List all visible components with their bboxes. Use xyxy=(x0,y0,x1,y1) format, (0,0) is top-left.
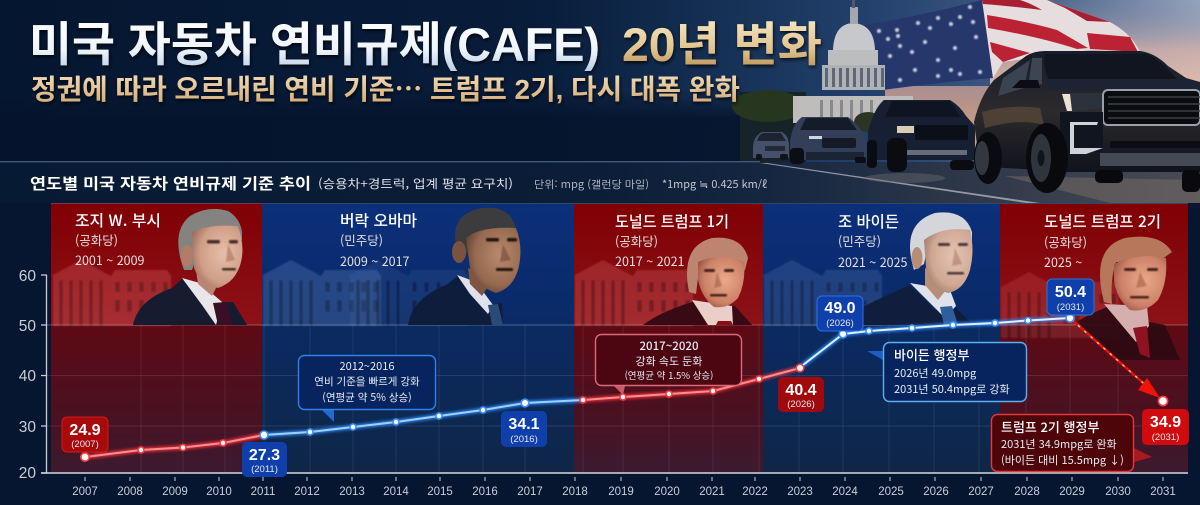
series: dotted rollback line with arrow xyxy=(1072,320,1160,398)
callout: Trump second administration: (바이든 대비 15.5mpg ↓) xyxy=(1001,452,1124,468)
label: Barack Obama: 2009 ~ 2017 xyxy=(340,251,410,270)
x axis with year labels: 2025 xyxy=(878,486,904,498)
value tag: 24.9 (2007) xyxy=(62,417,108,452)
callout: 2012-2016: 연비 기준을 빠르게 강화 xyxy=(314,374,420,389)
portrait: George W. Bush xyxy=(133,209,247,325)
x axis with year labels: 2019 xyxy=(608,486,634,498)
value tag: 34.9 (2031): (2031) xyxy=(1152,432,1179,443)
header banner with Capitol, flag and vehicles xyxy=(0,0,1200,203)
series: red segment 2018-2023 xyxy=(583,368,800,400)
chart heading: (승용차+경트럭, 업계 평균 요구치) xyxy=(318,175,513,192)
x axis with year labels: 2007 xyxy=(72,486,98,498)
x axis with year labels: 2012 xyxy=(294,486,320,498)
chart heading: 연도별 미국 자동차 연비규제 기준 추이 xyxy=(30,172,311,194)
label: Joe Biden: 2021 ~ 2025 xyxy=(838,252,908,271)
value tag: 40.4 (2026): 40.4 xyxy=(785,382,817,399)
white house silhouettes xyxy=(51,260,1119,338)
callout: Trump second administration: 2031년 34.9mpg로 완화 xyxy=(1001,436,1117,452)
y axis: 40 xyxy=(19,368,36,385)
value tag: 50.4 (2031) xyxy=(1047,279,1094,315)
portrait: Donald Trump second term xyxy=(1077,237,1180,360)
chart heading: *1mpg ≒ 0.425 km/ℓ xyxy=(662,177,767,192)
label: Barack Obama: 버락 오바마 xyxy=(340,209,417,231)
illustration: small car xyxy=(753,132,789,160)
callout: 2017-2020: (연평균 약 1.5% 상승) xyxy=(625,368,713,382)
illustration: large black SUV xyxy=(974,51,1200,193)
x axis with year labels: 2014 xyxy=(383,486,409,498)
x axis with year labels: 2013 xyxy=(339,486,365,498)
x axis with year labels: 2016 xyxy=(472,486,498,498)
y axis: 30 xyxy=(19,419,36,436)
administration bands xyxy=(51,203,1188,473)
value tag: 49.0 (2026): (2026) xyxy=(826,318,854,329)
value tag: 49.0 (2026): 49.0 xyxy=(824,300,856,317)
value tag: 34.1 (2016): (2016) xyxy=(510,434,538,445)
title: 20년 변화 xyxy=(622,18,822,71)
callout: Trump second administration: 트럼프 2기 행정부 xyxy=(1001,417,1099,436)
x axis with year labels: 2023 xyxy=(787,486,813,498)
y axis: 60 xyxy=(19,268,36,285)
label: Joe Biden: 조 바이든 xyxy=(838,210,899,232)
x axis with year labels: 2026 xyxy=(923,486,949,498)
gridlines xyxy=(46,325,1188,473)
x axis with year labels: 2022 xyxy=(742,486,768,498)
callout: 2012-2016 xyxy=(298,356,436,422)
callout: Biden administration: 2026년 49.0mpg xyxy=(894,365,977,381)
value tag: 34.1 (2016): 34.1 xyxy=(508,416,540,433)
portrait: Barack Obama xyxy=(408,208,520,325)
label: Donald Trump first term: 도널드 트럼프 1기 xyxy=(615,210,729,232)
x axis with year labels: 2021 xyxy=(699,486,725,498)
callout: 2012-2016: 2012~2016 xyxy=(340,358,394,374)
x axis with year labels: 2015 xyxy=(427,486,453,498)
x axis with year labels: 2017 xyxy=(517,486,543,498)
label: Donald Trump first term: (공화당) xyxy=(615,231,658,250)
label: Barack Obama: (민주당) xyxy=(340,230,383,249)
label: Donald Trump first term xyxy=(615,210,729,270)
x axis with year labels: 2024 xyxy=(832,486,858,498)
data point markers xyxy=(81,314,1168,461)
x axis with year labels: 2029 xyxy=(1059,486,1085,498)
value tag: 40.4 (2026) xyxy=(778,377,824,412)
callout: Biden administration: 바이든 행정부 xyxy=(894,345,969,364)
illustration: crossover xyxy=(790,117,866,164)
x axis with year labels: 2010 xyxy=(206,486,232,498)
label: Donald Trump second term: (공화당) xyxy=(1044,232,1087,251)
y axis xyxy=(19,268,47,482)
x axis with year labels: 2030 xyxy=(1105,486,1131,498)
label: Donald Trump second term xyxy=(1044,210,1161,271)
y axis: 50 xyxy=(19,318,36,335)
value tag: 27.3 (2011): (2011) xyxy=(251,464,278,475)
callout: Biden administration: 2031년 50.4mpg로 강화 xyxy=(894,381,1010,397)
x axis with year labels: 2027 xyxy=(968,486,994,498)
value tag: 50.4 (2031): 50.4 xyxy=(1055,284,1086,301)
label: George W. Bush: 조지 W. 부시 xyxy=(75,209,161,231)
title: 미국 자동차 연비규제(CAFE) xyxy=(29,18,600,71)
callout: Trump second administration xyxy=(992,414,1152,472)
callout: 2017-2020: 2017~2020 xyxy=(639,338,699,354)
series: red segment 2007-2011 xyxy=(85,435,264,457)
label: Donald Trump second term: 도널드 트럼프 2기 xyxy=(1044,210,1161,232)
x axis with year labels: 2008 xyxy=(117,486,143,498)
line chart: CAFE standard by year xyxy=(85,318,1160,457)
chart heading xyxy=(30,172,767,194)
value tag: 34.1 (2016) xyxy=(501,411,547,447)
x axis with year labels: 2011 xyxy=(251,486,275,498)
value tag: 27.3 (2011): 27.3 xyxy=(249,447,280,464)
illustration: Capitol building xyxy=(732,0,913,162)
label: Barack Obama xyxy=(340,209,417,270)
label: George W. Bush: 2001 ~ 2009 xyxy=(75,250,145,269)
road xyxy=(0,162,1200,203)
callout: 2017-2020 xyxy=(596,334,742,395)
label: George W. Bush: (공화당) xyxy=(75,230,118,249)
x axis with year labels: 2031 xyxy=(1150,486,1176,498)
value tag: 34.9 (2031) xyxy=(1142,409,1189,445)
callout: 2012-2016: (연평균 약 5% 상승) xyxy=(322,390,412,405)
portrait: Joe Biden xyxy=(863,212,973,325)
portrait: Donald Trump first term xyxy=(643,238,752,325)
x axis with year labels xyxy=(41,473,1188,498)
illustration: pickup SUV xyxy=(867,100,975,172)
value tag: 49.0 (2026) xyxy=(817,296,863,331)
x axis with year labels: 2018 xyxy=(562,486,588,498)
series: blue segment 2011-2018 xyxy=(264,400,583,435)
label: Donald Trump first term: 2017 ~ 2021 xyxy=(615,251,685,270)
value tag: 50.4 (2031): (2031) xyxy=(1057,302,1084,313)
callout: 2017-2020: 강화 속도 둔화 xyxy=(636,353,702,369)
chart heading: 단위: mpg (갤런당 마일) xyxy=(534,177,649,192)
y axis: 20 xyxy=(19,465,36,482)
illustration: US flag xyxy=(865,0,1140,90)
value tag: 27.3 (2011) xyxy=(242,442,287,477)
value tag: 24.9 (2007): (2007) xyxy=(71,439,99,450)
x axis with year labels: 2009 xyxy=(162,486,188,498)
callout: Biden administration xyxy=(867,342,1026,402)
value tag: 40.4 (2026): (2026) xyxy=(787,399,815,410)
subtitle: 정권에 따라 오르내린 연비 기준… 트럼프 2기, 다시 대폭 완화 xyxy=(31,68,740,108)
label: Donald Trump second term: 2025 ~ xyxy=(1044,252,1082,271)
label: Joe Biden: (민주당) xyxy=(838,231,881,250)
label: Joe Biden xyxy=(838,210,908,271)
value tag: 34.9 (2031): 34.9 xyxy=(1150,414,1181,431)
x axis with year labels: 2028 xyxy=(1014,486,1040,498)
x axis with year labels: 2020 xyxy=(654,486,680,498)
value tag: 24.9 (2007): 24.9 xyxy=(69,422,101,439)
series: blue segment 2023-2029 xyxy=(803,318,1070,365)
label: George W. Bush xyxy=(75,209,161,269)
